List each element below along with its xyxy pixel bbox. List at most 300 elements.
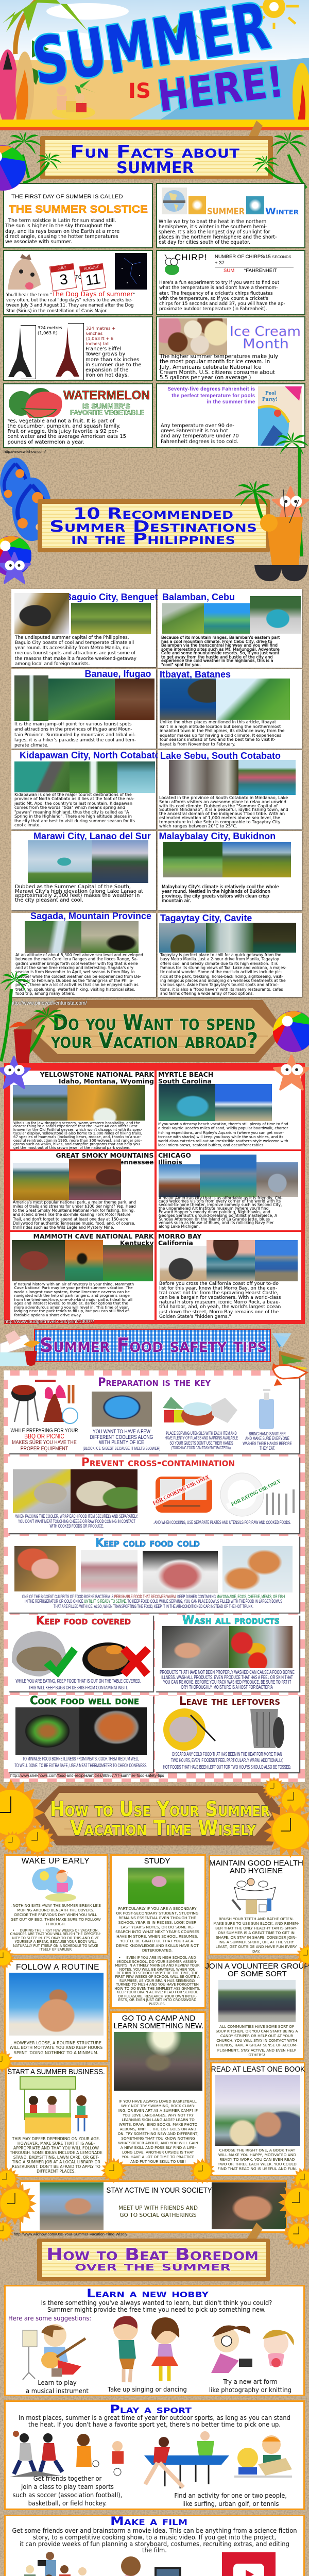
photo: hills (162, 603, 204, 634)
text: estimated elevation of 1,000 meters above sea level, the (159, 815, 280, 820)
panel: red frame destinations abroad (4, 1062, 305, 1324)
text (115, 1906, 199, 1953)
hemisphere text (159, 218, 277, 245)
text: pines", there are a lot of activities that can be enjoyed such as (15, 982, 139, 987)
text: Unlike the other places mentioned in this article, Itbayat (160, 720, 276, 724)
panel: make a film (4, 2515, 305, 2576)
text: second-to-none theater, improve comedy such as Second City, (159, 1202, 282, 1207)
heading: Keep food covered (36, 1615, 131, 1628)
caption: Take up singing or dancing (108, 2385, 187, 2394)
text: the ancestral domain of the indigenous T'boli tribe. With an (159, 811, 285, 816)
heading: Itbayat, Batanes (160, 669, 231, 680)
label: winter: Winter (265, 207, 299, 217)
text (160, 1670, 295, 1690)
text: OR POST-SECONDARY STUDENT, STUDYING (116, 1911, 199, 1916)
eiffel text: expansion of the (85, 367, 129, 373)
text: among local and foreign tourists. (15, 662, 90, 667)
text: Spring in the Highland". There are high altitude places in (14, 814, 132, 819)
illustration: photographer and knitting girl (205, 2324, 296, 2377)
text: AND PUT YOUR SKILL TO USE! (130, 2159, 186, 2164)
text: the city pleasant and cool. (15, 897, 83, 903)
text: sanitizer: WASHES THEIR HANDS BEFORE (243, 1441, 291, 1446)
text: Located in the province of South Cotabato in Mindanao, Lake (159, 795, 288, 800)
text (114, 1956, 200, 2006)
source link: http://www.pinoyadventurista.com/ (10, 1001, 87, 1006)
panel: cricket chirps (156, 250, 305, 315)
summer height label: (1,063 ft + 6 (86, 336, 113, 341)
height label: 324 metres (38, 325, 62, 330)
text: year round. Nestled in the highlands of Bukidnon (162, 889, 270, 894)
photo: fish (14, 1546, 76, 1591)
text: Who's up for jaw-dropping scenery, warm western hospitality, and the (13, 1121, 140, 1125)
source link: http://www.budgettravel.com/print/13007/ (4, 1319, 94, 1325)
heading: Leave the leftovers (179, 1695, 280, 1708)
panel: Itbayat (158, 669, 302, 749)
panel: wake up early (4, 1854, 108, 1955)
illustration: video editing (115, 2556, 182, 2576)
text (10, 1903, 101, 1926)
panel: go to a camp (110, 2011, 206, 2166)
heading: Fun Facts about Summer: Fun Facts about (70, 142, 240, 162)
text (15, 953, 143, 996)
text: Cave National Park may be your perfect summer vacation. The (14, 1285, 133, 1290)
heading: how to use your summer vacation time wisely: Vacation Time Wisely (70, 1817, 256, 1840)
solstice text: The sun is higher in the sky throughout the (5, 223, 112, 229)
text: 67 species of mammals (including bears, moose, and, thanks to a suc- (13, 1135, 141, 1139)
text: ing religious places and indulging on wellness treatments at the (160, 978, 286, 983)
panel: play a sport (4, 2400, 305, 2510)
text: sanitizer: BRING HAND SANITIZER (249, 1431, 285, 1436)
photo: watermelons (9, 388, 62, 418)
text (14, 1282, 134, 1317)
heading: Do you want to spend your vacation abroad?: Do you Want to spend (53, 1010, 255, 1035)
caption (26, 2379, 89, 2396)
text: YOU CAN REMOVE. BEFORE YOU PACK WASHED PRODUCE, BE SURE TO PAT IT (163, 1680, 291, 1685)
photo: ice cream (159, 318, 227, 355)
text: and farms offering a wide array of food options. (160, 991, 254, 996)
text: utensils: (TOUCHING FOOD CAN TRANSMIT BACTERIA). (171, 1445, 231, 1450)
text: local micro-brews, seafood buffets, and oceanfront tables. (158, 1143, 265, 1147)
title: HERE!: HERE! (155, 58, 287, 122)
panel: keep food covered (8, 1615, 153, 1691)
text: merous tourist spots and attractions are just some of (15, 651, 135, 656)
text: LEAST, GET OUTSIDE AND HAVE FUN EVERY (216, 1944, 297, 1949)
text: and attractions in the provinces of Ifugao and Moun- (14, 727, 132, 732)
panel: ice cream (156, 316, 305, 381)
text: APPROPRIATE AND THAT YOU WILL FOLLOW (13, 2146, 99, 2150)
illustration: kids playing soccer (72, 2433, 129, 2476)
text: can be a bargain for vacationers. With a world-class (159, 1295, 281, 1300)
text: WHATSOEVER ABOUT, AND YOU WILL GAIN (118, 2141, 198, 2145)
text: Before you cross the California coast off your to-do (159, 1281, 279, 1286)
text: MEET UP WITH FRIENDS AND (118, 2205, 198, 2211)
sign: beat boredom (37, 2239, 270, 2281)
sign: summer vacation time (26, 1785, 288, 1846)
place name: MYRTLE BEACH (158, 1071, 213, 1078)
text: . HOWEVER LOOSE, A ROUTINE STRUCTURE (11, 2041, 101, 2045)
text: utensils: HAVE PLENTY OF PLATES AND NAPKINS AVAILABLE (165, 1435, 238, 1440)
place name (158, 1071, 213, 1084)
text: SEARCH INTO WHAT NEXT YEAR'S COURSES (115, 1929, 199, 1934)
text: thrill rides such as the Wild Eagle and Mystery Mine. (13, 1225, 114, 1230)
heading: Lake Sebu, South Cotabato (160, 750, 281, 760)
calendar: July 3 (49, 263, 77, 291)
heading: Make a film (110, 2515, 187, 2528)
text: OR PLEASURE, RESEARCH YOUR OWN INTER- (118, 1994, 197, 1998)
text: CHANCES ARE THAT YOU WILL RELISH THE OPPORTU- (10, 1932, 101, 1936)
heading: 10 Recommended Summer Destinations in the Philippines: in the Philippines (71, 530, 235, 548)
caption: a musical instrument (26, 2387, 89, 2395)
text: Because of its mountain ranges, Balamban's eastern part (161, 635, 280, 640)
heading: 10 Recommended Summer Destinations in the Philippines: Summer Destinations (49, 518, 257, 536)
heading: ice cream month (230, 324, 301, 352)
text: NATURALLY PUT ITSELF ON A SCHEDULE TO WAKE (13, 1944, 98, 1948)
text: It is the main jump-off point for various tourist spots (14, 722, 132, 727)
text: equipment: MAKES SURE YOU HAVE THE (12, 1439, 76, 1446)
icon: green check (44, 1647, 78, 1677)
panel: leave the leftovers (155, 1695, 299, 1772)
text: to get away from the hustle and bustle of the city and (161, 654, 273, 659)
text (159, 796, 288, 828)
text: navigated with the help of park rangers, and programs range (14, 1293, 130, 1298)
title: IS: IS (128, 79, 151, 103)
text: THROUGH. SOME IDEAS INCLUDE A LEMONADE (10, 2150, 102, 2155)
text: • EVEN IF YOU ARE IN HIGH SCHOOL AND (118, 1956, 196, 1960)
pool text: grees Fahrenheit is too hot (161, 428, 228, 434)
text: isn't in a high altitude location but being the northernmost (160, 724, 281, 729)
pool text: Any temperature over 90 de- (161, 423, 234, 429)
caption (13, 2475, 122, 2508)
photo: volunteers (218, 1980, 296, 2022)
ice cream text: the most popular month for ice cream. In (160, 359, 270, 365)
text: coolers (83, 1429, 160, 1452)
icon: eiffel tower black (8, 328, 32, 377)
text: RESTAURANT. DON'T BE AFRAID TO APPLY TO (12, 2164, 100, 2169)
text: coolers: DIFFERENT COOLERS ALONG (90, 1434, 153, 1440)
heading: Do you want to spend your vacation abroad? (51, 1013, 258, 1048)
text: CHOOSE THE RIGHT ONE, A BOOK THAT (219, 2147, 295, 2153)
panel: learn a new hobby (4, 2285, 305, 2396)
icon: summer tile (188, 196, 206, 214)
panel: preparation (8, 1376, 299, 1453)
icon: eiffel tower red (56, 328, 79, 377)
text: CANDY STRIPER OR HELP OUT AT YOUR (220, 2033, 293, 2038)
illustration: boy with guitar (22, 2323, 86, 2380)
formula: NUMBER OF CHIRPS/15 SECONDS (215, 254, 291, 260)
solstice text: direct angle, causing the hotter temperatures (5, 234, 118, 240)
decoration: beach ball and purple starfish (0, 536, 32, 584)
text: ONE OF THE BIGGEST CULPRITS OF FOOD BORNE BACTERIA IS PERISHABLE FOOD THAT BECOMES WARM. KEEP DISHES CONTAINING MAYONNAISE, EGGS, CHEESE, MEATS, OR FISH (22, 1594, 285, 1599)
text: ILLNESS. WASH ALL PRODUCTS, EVEN PRODUCE THAT HAS A PEEL OR SKIN THAT (161, 1674, 293, 1681)
text: SCHOOL YEAR IS IN RECESS. LOOK OVER (118, 1920, 196, 1925)
text: DAY. (252, 1949, 260, 1954)
text: sanitizer: THEY EAT. (260, 1446, 275, 1451)
text: coolers: YOU WANT TO HAVE A FEW (93, 1429, 150, 1435)
cricket text: with the temperature, so if you count a cricket's (159, 296, 268, 301)
text: THIS WILL KEEP BUGS OR DEBRIS FROM CONTAMINATING IT. (28, 1685, 128, 1691)
place name: California (158, 1239, 193, 1247)
illustration: girl waking up (32, 1867, 79, 1902)
photo: beach (215, 1084, 272, 1121)
cricket text: what the temperature is and don't have a thermom- (159, 285, 278, 291)
text (118, 2099, 198, 2164)
text: some interesting sites such as Mt. Manunggal, Adventure (161, 647, 280, 651)
summer height label: 6inches (86, 331, 102, 336)
heading: LEARN SOMETHING NEW. (114, 2022, 203, 2030)
heading: OF SOME SORT (228, 1969, 287, 1978)
text: Trail, and don't forget to spend at least one day at 150-acre (13, 1217, 128, 1221)
photo: hot spring (117, 761, 155, 793)
text: Kidapawan is one of the major tourist destinations of the (14, 792, 132, 796)
text: year round. Its accessibility from Metro Manila, nu- (15, 646, 130, 651)
cricket text: proximate outdoor temperature (in Fahrenheit). (159, 307, 267, 312)
text: ages and interest levels) to muddier, darker options that the (14, 1301, 128, 1306)
photo: cascades (206, 923, 253, 953)
bracket (21, 325, 36, 379)
text: cool climate. (14, 823, 41, 827)
photo: campfire (114, 2032, 202, 2091)
caption: like surfing, urban golf, or tennis (182, 2500, 279, 2508)
text: gada's weather brings forth cool weather with fog that is eerie (15, 961, 138, 966)
sign: vacation abroad (10, 1000, 288, 1062)
photo: waterfall (70, 761, 117, 793)
text: At an altitude of about 5,300 feet above sea level and enveloped (15, 953, 143, 957)
cell: Myrtle Beach (157, 1071, 301, 1149)
heading: Do you want to spend your vacation abroad?: your Vacation abroad? (50, 1028, 258, 1053)
illustration: film crew (13, 2551, 91, 2576)
text: ON! SUMMER IS A GREAT TIME TO GET IN (218, 1930, 295, 1935)
icon: youtube play button (233, 2564, 264, 2576)
photo: waterfall (25, 921, 81, 953)
watermelon text: Yes, vegetable and not a fruit. It is part of (7, 418, 114, 423)
photo: pines (71, 603, 151, 634)
panel: gingham food safety background (4, 1370, 305, 1782)
text: BRUSH YOUR TEETH AND BATHE OFTEN. (219, 1917, 294, 1921)
photo: river (14, 761, 70, 792)
text: miles of trails and streams for under $100 per night? Yep. Head (13, 1204, 136, 1209)
text: GET OUT OF BED, THEN MAKE SURE TO FOLLOW (10, 1917, 100, 1922)
text: tiful harbor, and, oh yeah, the world's largest ocean (159, 1304, 281, 1310)
solstice title: THE SUMMER SOLSTICE (9, 204, 148, 215)
text: to-nose with sharks) will keep you busy while the sun shines, and its (158, 1134, 283, 1139)
stamp: for eating use only: FOR EATING USE ONLY (230, 1478, 282, 1507)
panel: Sagada (11, 913, 156, 997)
caption: such as soccer (association football), (13, 2492, 122, 2499)
photo: volcano (159, 923, 206, 953)
caption: join a class to play team sports (21, 2483, 114, 2491)
text: DECIDE THE PREVIOUS DAY WHEN YOU WILL (14, 1912, 97, 1917)
text: lodging near the park tends to fill up, but you can still find af- (14, 1309, 130, 1313)
text (160, 953, 286, 996)
text: DRY THOROUGHLY. MOISTURE IS A HOST FOR BACTERIA (181, 1685, 273, 1690)
photo: plates and utensils (161, 1395, 237, 1428)
panel: hemispheres (156, 183, 305, 248)
subheading: favorite vegetable (70, 402, 144, 416)
text: cessful reintroduction in 1995, more than 300 wolves), and ranger pro- (13, 1139, 142, 1143)
text: MOPING AROUND BENEATH THE COVERS. (17, 1907, 94, 1912)
photo: park (163, 842, 222, 877)
eiffel text: iron on hot days. (85, 372, 129, 378)
text (159, 1282, 281, 1319)
heading: 10 Recommended Summer Destinations in the Philippines (49, 505, 257, 548)
text: Baguio City boasts of cool and temperate climate all (15, 640, 134, 646)
text: inhabited town in the Philippines, its distance away from the (160, 728, 285, 733)
text: has a cool mountain climate. From Cebu City, drive to (161, 639, 272, 644)
heading: how to beat boredom over the summer: over the summer (75, 2259, 231, 2274)
panel: eiffel tower (3, 316, 153, 381)
text: sanitizer (243, 1432, 291, 1451)
icon: kids building sandcastle (52, 80, 95, 119)
text (13, 1200, 136, 1230)
heading: Banaue, Ifugao (84, 669, 151, 679)
text: TWO OR THREE EACH WEEK. YOU COULD (218, 2162, 297, 2166)
text: SPENT 'DOING NOTHING' TO A MINIMUM. (14, 2050, 98, 2055)
watermelon text: the cucumber, pumpkin, and squash family. (7, 423, 121, 429)
place name (33, 1233, 153, 1246)
text: the film. (142, 2547, 167, 2554)
text: ALBUMS, KNIT ... THE LIST GOES ON AND (120, 2127, 196, 2131)
text: YOU LOVE LANGUAGES, WHY NOT TRY (123, 2113, 194, 2117)
place name: Idaho, Montana, Wyoming (59, 1077, 154, 1085)
source link: http://www.wikihow.com/Use-Your-Summer-Vacation-Time-Wisely (14, 2232, 127, 2236)
text: TWO HOURS, EVEN IF DOESN'T FEEL PARTICULARLY WARM. ADDITIONALLY, (171, 1758, 283, 1764)
text: NOTES. YOU WILL BE GRATEFUL WHEN YOU (119, 1968, 195, 1972)
text: Balamban via the transcentral highway and you will find (161, 643, 278, 648)
place name: South Carolina (158, 1077, 212, 1085)
text: utensils: PLACE SERVING UTENSILS WITH EACH ITEM AND (166, 1430, 237, 1435)
text: comes from the words "tida" which means spring and (14, 805, 125, 810)
ice cream text: 5.5 gallons per year (on average.) (160, 375, 251, 381)
text: FRIENDS, HAVE A GREAT SENSE OF ACCOM- (216, 2043, 298, 2047)
text: TURNED TO MUSH AND YOU HAVE FORGOTTEN (116, 1982, 199, 1987)
text: In most places, summer is a great time of year for outdoor sports, as long as you can stand (19, 2414, 290, 2421)
icon: dog (8, 254, 41, 290)
text: BER THAT THE ONLY HEALTHY TAN IS SPRAY- (215, 1926, 297, 1930)
heading: Fun Facts about Summer (70, 142, 240, 177)
text: it can provide weeks of fun planning a storyboard, costumes, recruiting extras, and editing (20, 2540, 289, 2548)
place name (56, 1152, 153, 1165)
panel: summer solstice (3, 183, 153, 248)
cricket text: chirps for 15 seconds and add 37, you will have the ap- (159, 301, 285, 307)
photo: crabs on ice (222, 1546, 293, 1592)
heading (205, 1962, 309, 1977)
photo: waterfall (14, 675, 48, 721)
cricket text (159, 280, 285, 312)
photo: cave sign (12, 1240, 65, 1281)
decoration: palm trees, starfish and drink (235, 432, 309, 581)
watermelon text: cent water and the average American eats 15 (7, 434, 126, 439)
text: NITY TO SLEEP IN. IT'S OKAY TO DO THIS AND GIVE (12, 1936, 99, 1940)
text: Tagaytay is perfect place to chill for a quick getaway from the (160, 953, 281, 957)
solstice text: . The term solstice is Latin for sun stand still. (5, 218, 116, 224)
photo: mountain view (222, 842, 290, 877)
place name: YELLOWSTONE NATIONAL PARK (40, 1071, 154, 1078)
text: fordable options a short drive away. (14, 1313, 81, 1317)
text: coolers: (BLOCK ICE IS BEST BECAUSE IT MELTS SLOWER) (83, 1446, 160, 1451)
height label (38, 325, 62, 335)
cell: Mammoth Cave (10, 1232, 154, 1320)
illustration: singing boy and dancing girl (112, 2316, 182, 2385)
sign: ten destinations (38, 499, 270, 552)
text: trekking, spelunking, waterfall hiking, visiting historical sites, (15, 987, 135, 992)
suggestions label: Here are some suggestions: (8, 2314, 91, 2323)
text: utensils: SO YOUR GUESTS DON'T USE THEIR HANDS (169, 1440, 233, 1446)
text: Georges Serraut's ground-breaking pointillist masterpiece, A (159, 1213, 277, 1218)
text: jestic Mt. Apo, the country's tallest mountain. Kidapawan (14, 801, 132, 806)
text (163, 1752, 291, 1771)
heading: Malaybalay City, Bukidnon (159, 831, 276, 841)
text: WILL MAKE YOU HAPPY, MOTIVATED AND (218, 2153, 296, 2157)
text: between the main Cordillera Ranges and the Ilocos Range, Sa- (15, 957, 138, 961)
text: TO WELL DONE. TO BE EXTRA SAFE, USE A MEAT THERMOMETER TO CHECK DONENESS. (14, 1763, 147, 1769)
text: equator makes up for having a cold climate. It experiences (160, 733, 281, 738)
text: cago welcomes visitors from every corner of the world with its (159, 1199, 281, 1204)
decoration: palm, drink, starfish and beach ball around abroad sign (0, 958, 309, 1095)
panel: Banaue (11, 669, 156, 749)
text: world's longest cave system, these limestone caverns can be (14, 1289, 130, 1294)
heading: JOIN A VOLUNTEER GROUP (205, 1962, 309, 1970)
text: If natural history with an air of mystery is your thing, Mammoth (14, 1282, 134, 1286)
calendar: July 3: 3 (59, 271, 68, 288)
heading: how to use your summer vacation time wisely (50, 1801, 270, 1836)
text: GO TO SOCIAL GATHERINGS (119, 2212, 197, 2218)
text (22, 1595, 285, 1609)
text: Sunday Afternoon on the Island of La Grande Jatte, blues (159, 1217, 270, 1222)
illustration: orange cooking tray (153, 1476, 212, 1513)
caption: Learn to play (38, 2379, 77, 2387)
text: READY TO WORK. YOU CAN EVEN READ (219, 2157, 295, 2162)
text: Summer might provide the free time you need to pick up something new. (47, 2306, 266, 2314)
eiffel text (85, 346, 141, 378)
text: A major American city that is as affordable as it is friendly, Chi- (159, 1195, 283, 1200)
photo: water park (159, 1084, 215, 1121)
icon: globe (162, 188, 187, 214)
text: If you want a dreamy beach vacation, there's still plenty of time to find (158, 1122, 288, 1126)
cell: Yellowstone (10, 1071, 154, 1149)
label: summer: SUMMER (207, 207, 245, 217)
yellow and orange band (0, 120, 309, 130)
text: approximately 2,300 feet) makes the weather in (15, 893, 140, 899)
text (160, 720, 285, 747)
text (10, 2137, 102, 2174)
text: tic natural wonder. Some of the must-do activities include pic- (160, 970, 282, 974)
photo: park sign (69, 1159, 121, 1200)
summer height label: 324 metres + (86, 326, 115, 331)
text: October while the coldest weather can be experienced from De- (15, 974, 141, 979)
text: world-class eateries roll out an irresistible southern-style welcome with (158, 1139, 288, 1143)
text: WRITE, DRAW, BIND BOOKS, MAKE PHOTO (119, 2122, 197, 2127)
header beach scene (0, 0, 309, 131)
text: HAVE IN STORE. WHEN SCHOOL RESUMES, (116, 1934, 198, 1939)
icon: winter tile (246, 196, 264, 214)
photo: lake shore (92, 840, 148, 883)
text: SHAPE, OR STAY IN SHAPE. CONSIDER JOIN- (216, 1935, 297, 1940)
text: from the tried-and-true, one-of-a-kind major paths (ideal for all (14, 1297, 132, 1301)
heading: Balamban, Cebu (162, 592, 235, 602)
source link: http://www.wikihow.com/ (4, 449, 46, 454)
text: equipment: BBQ OR PICNIC (24, 1433, 64, 1440)
panel: study (110, 1854, 206, 2009)
label: chirp: CHIRP! (175, 252, 208, 262)
text: more adventurous among you will revel in. This time of year, (14, 1304, 129, 1310)
place name: CHICAGO (158, 1151, 191, 1159)
dog days body: tween July 3 and August 11. They are named after the Dog (6, 302, 133, 308)
text: packing: YOU DON'T WANT MEAT TOUCHING CHEESE OR RAW FOOD COMING IN CONTACT (18, 1519, 135, 1524)
text: THROUGH. (46, 1922, 65, 1926)
text: The undisputed summer capital of the Philippines, (15, 635, 129, 640)
heading: Sagada, Mountain Province (30, 911, 151, 921)
subheading: favorite vegetable: FAVORITE VEGETABLE (70, 409, 144, 416)
